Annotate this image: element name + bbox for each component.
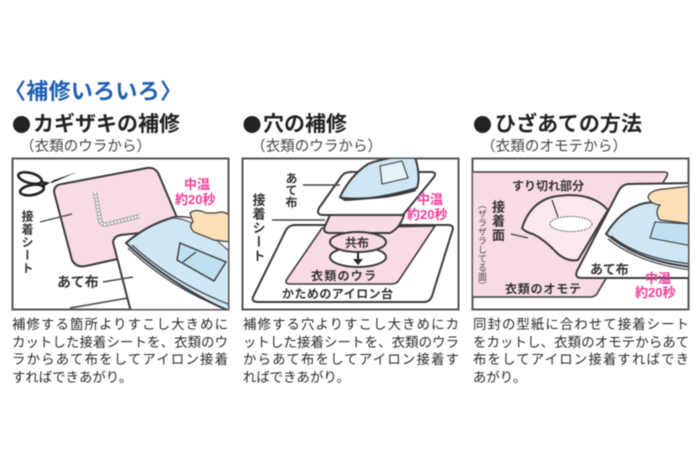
illustration frame: knee patch [472,158,688,310]
white pressing cloth [113,232,230,312]
description text: knee patch: をカットし、衣類のオモテからあて [473,335,689,350]
illustration frame: kagizaki [12,158,228,310]
temperature note: 中温 [645,271,671,286]
label: garment back: 衣類のウラ [311,268,376,283]
worn area [550,200,592,232]
hand [190,210,230,242]
icon: scissors [17,170,77,197]
iron illustration [606,186,692,270]
adhesive sheet [324,215,404,233]
label: pressing cloth vertical [284,172,340,209]
description text: kagizaki: すればできあがり。 [12,370,132,385]
L-shaped tear [95,192,140,224]
heading: kagizaki: カギザキの補修 [33,113,180,136]
label: worn part: すり切れ部分 [512,178,584,193]
illustration: kagizaki [17,168,232,312]
temperature note [407,192,447,222]
label: garment front: 衣類のオモテ [505,281,581,296]
hand [648,186,692,224]
knee patch shape [522,195,608,260]
panel: kagizaki repair [12,113,232,385]
pink garment back [286,226,435,284]
pink garment front [472,172,668,297]
label: pressing cloth: あて布 [57,274,99,290]
label: pressing cloth [57,274,133,290]
title: 〈補修いろいろ〉 [4,79,182,104]
temperature note [635,271,675,300]
heading: knee patch: ひざあての方法 [495,112,642,136]
label: ironing board: かためのアイロン台 [282,286,393,301]
matching fabric patches: 共布 [345,235,369,250]
label: adhesive sheet vertical [250,192,325,263]
iron illustration [126,210,232,312]
subheading: knee patch: （衣類のオモテから） [481,138,627,155]
description text: knee patch: 同封の型紙に合わせて接着シート [473,316,689,332]
description text: kagizaki [12,316,228,385]
label: rough side: （ザラザラしてる面） [477,200,487,290]
panel: knee patch [472,112,692,385]
label: pressing cloth vertical: あて布 [284,172,298,209]
description text: kagizaki: ラからあて布をしてアイロン接着 [12,351,228,367]
description text: hole: ットした接着シートを、衣類のウラ [243,334,459,350]
description text: knee patch: あがり。 [473,370,526,385]
label: adhesive sheet [20,209,72,275]
temperature note: 約20秒 [175,192,215,207]
panel: hole repair [242,113,459,385]
temperature note: 中温 [184,177,210,192]
illustration: hole [253,157,453,302]
description text: knee patch [473,316,689,385]
description text: hole: からあて布をしてアイロン接着す [243,351,459,367]
temperature note [175,177,215,207]
label: adhesive sheet: 接着シート [20,209,34,275]
illustration frame: hole [242,158,458,310]
pressing cloth [318,172,435,215]
description text: kagizaki: 補修する箇所よりすこし大きめに [12,316,228,332]
label: pressing cloth: あて布 [590,262,629,277]
label: adhesive face: 接着面 [490,199,505,243]
description text: hole [243,317,459,385]
matching fabric patches [330,232,386,267]
heading: hole: 穴の補修 [263,113,347,136]
temperature note: 中温 [417,192,443,207]
subheading: hole: （衣類のウラから） [251,138,382,155]
cloth lower edge line [70,298,128,308]
description text: knee patch: 布をしてアイロン接着すればでき [473,351,689,367]
subheading: kagizaki: （衣類のウラから） [20,138,151,155]
temperature note: 約20秒 [407,207,447,222]
label: adhesive face [490,199,528,243]
pink adhesive sheet [54,168,178,266]
description text: kagizaki: カットした接着シートを、衣類のウ [12,334,228,350]
iron illustration [340,157,419,200]
pressing cloth [576,183,692,278]
description text: hole: 補修する穴よりすこし大きめにカ [243,317,459,332]
illustration: knee patch [472,172,692,297]
description text: hole: ればできあがり。 [243,370,350,385]
label: adhesive sheet vertical: 接着シート [250,192,266,263]
temperature note: 約20秒 [635,285,675,300]
ironing board [253,225,453,302]
